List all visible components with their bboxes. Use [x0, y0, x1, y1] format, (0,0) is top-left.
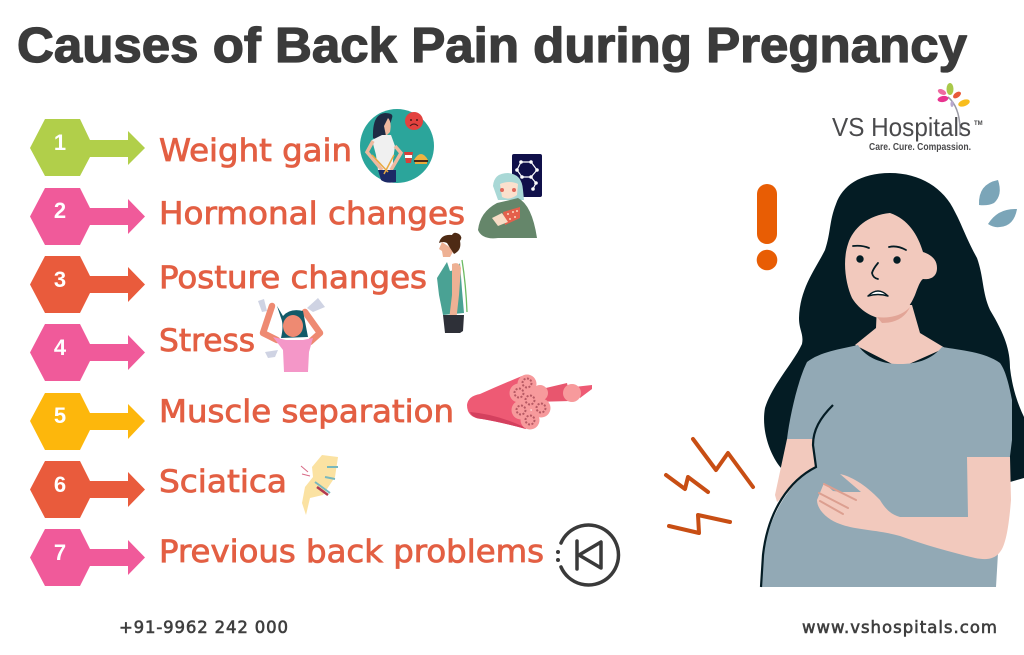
- facial features: [853, 246, 906, 279]
- list item 3: posture changes: 3: [54, 267, 66, 292]
- list item 3: posture changes: Posture changes: [159, 260, 427, 296]
- logo: VS Hospitals: TM: [974, 121, 983, 127]
- icon: posture: [437, 233, 467, 333]
- list item 1: weight gain: Weight gain: [159, 133, 352, 169]
- list item 1: weight gain: [30, 119, 352, 176]
- list item 5: muscle separation: Muscle separation: [159, 394, 454, 430]
- front arm: [817, 457, 1011, 559]
- icon: weight gain: [360, 109, 434, 183]
- list item 5: muscle separation: 5: [54, 403, 66, 428]
- icon: sciatica: [301, 455, 338, 515]
- list item 7: previous back problems: [30, 529, 544, 586]
- icon: muscle: [467, 374, 592, 430]
- icon: pain lightning bolts: [666, 439, 753, 533]
- belly line: [761, 405, 833, 587]
- icon: exclamation mark: [757, 184, 777, 270]
- finger lines: [819, 484, 856, 514]
- list item 4: stress: 4: [54, 335, 67, 360]
- hair: [764, 173, 1024, 482]
- icon: stress: [258, 298, 325, 372]
- footer: website: www.vshospitals.com: [802, 618, 997, 637]
- list item 7: previous back problems: 7: [54, 540, 66, 565]
- list item 2: hormonal changes: [30, 188, 465, 245]
- list item 5: muscle separation: [30, 393, 454, 450]
- back arm: [775, 439, 816, 502]
- list item 4: stress: Stress: [159, 323, 255, 359]
- icon: back button: [556, 525, 618, 585]
- icon: hormonal changes: [478, 154, 542, 238]
- logo: VS Hospitals: Care. Cure. Compassion.: [869, 142, 971, 153]
- neck and face: [845, 213, 945, 368]
- icon: sweat drops: [979, 180, 1017, 227]
- footer: phone number: +91-9962 242 000: [119, 618, 288, 637]
- title: Causes of Back Pain during Pregnancy: [17, 19, 967, 73]
- illustration: worried pregnant woman: [761, 173, 1024, 587]
- list item 6: sciatica: Sciatica: [159, 464, 287, 500]
- list item 1: weight gain: 1: [54, 130, 66, 155]
- list item 7: previous back problems: Previous back problems: [159, 534, 544, 570]
- list item 2: hormonal changes: Hormonal changes: [159, 196, 465, 232]
- list item 3: posture changes: [30, 256, 427, 313]
- logo: VS Hospitals: VS Hospitals: [832, 112, 971, 142]
- neck shadow: [877, 307, 910, 323]
- shirt: [761, 345, 1012, 587]
- list item 2: hormonal changes: 2: [54, 198, 66, 223]
- logo: VS Hospitals: [832, 83, 983, 153]
- list item 4: stress: [30, 323, 255, 381]
- list item 6: sciatica: 6: [54, 472, 66, 497]
- list item 6: sciatica: [30, 461, 287, 518]
